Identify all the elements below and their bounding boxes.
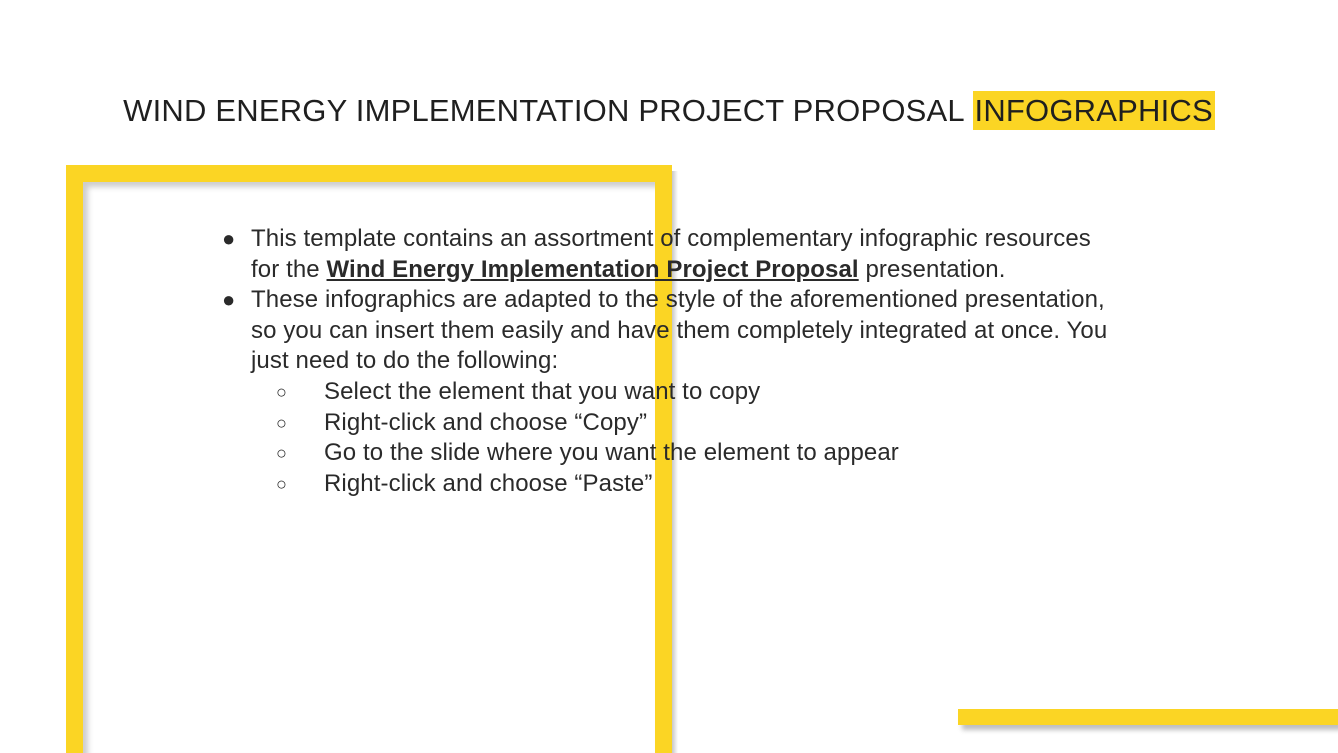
text block: instructions: for the Wind Energy Implementation Project Proposal presentation. [251,256,1006,283]
text block: instructions: Go to the slide where you want the element to appear [324,439,899,466]
text block: instructions: Right-click and choose “Paste” [324,470,652,497]
text block: instructions [222,225,1107,497]
text block: instructions: ○ [276,474,287,494]
text block: instructions: Right-click and choose “Copy” [324,409,647,436]
text block: instructions: Select the element that you want to copy [324,378,760,405]
text block: instructions: This template contains an assortment of complementary infographic resources [251,225,1091,252]
text block: instructions: ○ [276,413,287,433]
yellow frame [66,165,672,753]
text block: instructions: ○ [276,443,287,463]
text block: instructions: ● [222,287,235,312]
text block: instructions: just need to do the following: [251,347,558,374]
yellow bar bottom right [958,709,1338,725]
title: WIND ENERGY IMPLEMENTATION PROJECT PROPOSAL INFOGRAPHICS [123,93,1213,128]
text block: instructions: so you can insert them easily and have them completely integrated at once. You [251,317,1107,344]
text block: instructions: ○ [276,382,287,402]
text block: instructions: These infographics are adapted to the style of the aforementioned presentation, [251,286,1105,313]
text block: instructions: ● [222,226,235,251]
